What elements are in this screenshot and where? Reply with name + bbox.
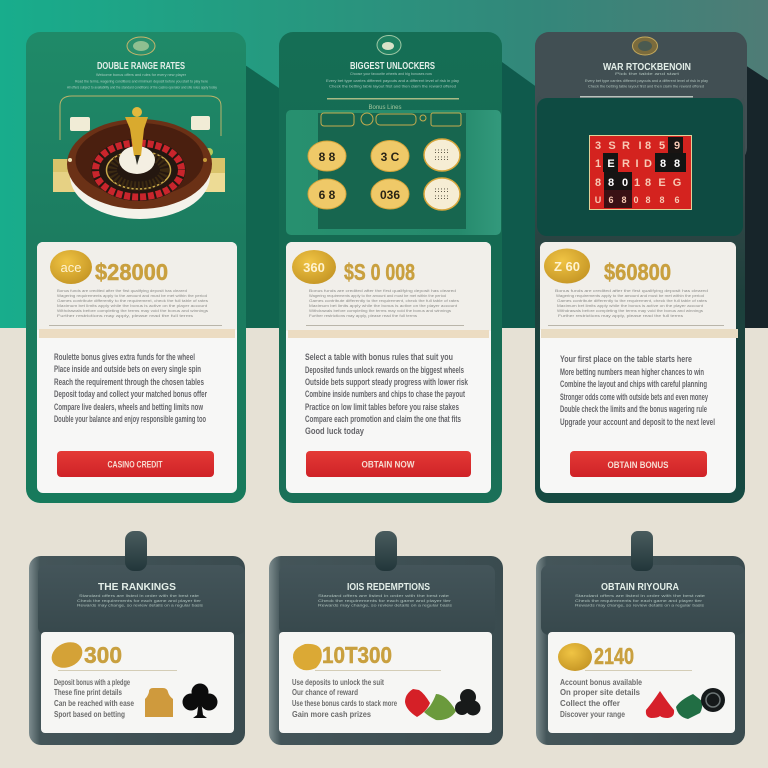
icon: gold crown turret	[125, 107, 148, 165]
text block: fine print: Withdrawals before completing the terms may void the bonus and winnings	[557, 308, 703, 313]
chart: red number grid: 8	[645, 177, 651, 189]
panel: dark green table	[537, 98, 743, 236]
text block: fine print: Wagering requirements apply to the amount and must be met within the period	[556, 293, 704, 298]
text block: description: Your first place on the table starts here	[560, 354, 692, 364]
icon: right bill	[191, 116, 210, 130]
betting controls	[321, 113, 461, 126]
background: lower beige band	[0, 328, 768, 768]
text block: intro: Rewards may change, so review details on a regular basis	[77, 604, 203, 608]
text block: Use deposits to unlock the suit	[292, 678, 384, 687]
panel: white offer	[41, 632, 234, 733]
text block: description	[560, 354, 715, 427]
text block: description: Reach the requirement through the chosen tables	[54, 377, 204, 387]
coin grid: 3 C	[381, 150, 400, 164]
button: OBTAIN BONUS	[608, 460, 668, 471]
chart: red number grid: 8	[645, 195, 651, 205]
chart: red number grid: 1	[634, 177, 640, 189]
text block: Account bonus available	[560, 678, 642, 687]
background: dark side shadows	[245, 62, 768, 328]
text block: description: Compare each promotion and claim the one that fits	[305, 414, 461, 424]
icon: card 1 emblem	[127, 37, 155, 55]
button: CASINO CREDIT	[108, 460, 163, 470]
coin grid: :::::	[434, 149, 450, 155]
text block: description	[54, 352, 207, 424]
text block: description: Select a table with bonus rules that suit you	[305, 352, 453, 362]
text block: fine print: Games contribute differently to the requirement, check the full table of rates	[57, 298, 208, 303]
chart: red number grid: G	[673, 177, 681, 189]
text block	[292, 678, 397, 719]
panel: white offer	[548, 632, 735, 733]
heading: card 1: DOUBLE RANGE RATES	[97, 61, 185, 72]
icon: clip	[125, 531, 147, 571]
text block: Discover your range	[560, 710, 625, 719]
chart: red number grid: 3	[595, 140, 601, 152]
chart: red number grid: R	[622, 158, 630, 170]
icon: red spade	[646, 691, 674, 718]
text block: fine print: Games contribute differently to the requirement, check the full table of rates	[557, 298, 707, 303]
text block	[54, 678, 134, 719]
chart: red number grid: U	[595, 195, 601, 205]
text block: intro: Standard offers are listed in order with the best rate	[575, 594, 705, 598]
text block: fine print	[309, 288, 459, 318]
coin grid: 8 8	[319, 150, 336, 164]
icon: clip	[631, 531, 653, 571]
text block: description: Compare live dealers, wheels and betting limits now	[54, 402, 204, 412]
icon: gold coin	[292, 250, 336, 284]
text block: card 2 intro: Choose your favourite wheels and big bonuses now	[350, 72, 432, 76]
heading: OBTAIN RIYOURA	[601, 582, 679, 593]
icon: green chip	[424, 694, 456, 720]
text block: intro: Check the requirements for each game and player tier	[575, 599, 703, 603]
chart: red number grid: 0	[622, 177, 628, 189]
amount: 10T300	[322, 642, 392, 668]
icon: card 2 emblem	[377, 36, 401, 54]
text block: Use these bonus cards to stack more	[292, 699, 397, 708]
coin grid: :::::	[434, 156, 450, 162]
chart: red number grid: D	[644, 158, 652, 170]
panel: card 1	[26, 32, 246, 503]
text block: card 2 intro: Every bet type carries different payouts and a different level of risk in play	[326, 79, 459, 83]
panel: card 1 offer	[37, 242, 237, 493]
icon: black chip	[701, 688, 725, 712]
text block: card 2 intro: Check the betting table layout first and then claim the reward offered	[329, 84, 456, 88]
chart: red number grid: I	[638, 140, 642, 152]
chart: red number grid: 8	[660, 158, 666, 170]
chart: red number grid: R	[622, 140, 630, 152]
amount: 2140	[594, 643, 634, 669]
text block: intro	[575, 594, 705, 608]
text block: description: Place inside and outside bets on every single spin	[54, 364, 201, 374]
button	[57, 451, 214, 477]
chart: red number grid: 8	[621, 195, 627, 205]
text block: These fine print details	[54, 688, 122, 697]
amount: $S 0 008	[344, 259, 415, 285]
amount: 300	[84, 642, 122, 668]
text block: intro: Check the requirements for each game and player tier	[318, 599, 452, 603]
text block: Collect the offer	[560, 699, 620, 708]
icon: gold box	[145, 688, 173, 717]
text block	[560, 678, 642, 719]
text block: fine print: Bonus funds are credited after the first qualifying deposit has cleared	[309, 288, 456, 293]
text block: description: Roulette bonus gives extra funds for the wheel	[54, 352, 195, 362]
text block: card 3 intro: Pick the table and start	[615, 72, 679, 76]
text block: intro: Check the requirements for each game and player tier	[77, 599, 202, 603]
icon: black spade	[455, 689, 480, 716]
chart: red number grid: 8	[608, 177, 614, 189]
chart: red number grid: 8	[595, 177, 601, 189]
text block: fine print: Further restrictions may apply, please read the full terms	[309, 313, 417, 318]
button	[570, 451, 707, 477]
text block: fine print	[57, 288, 208, 318]
heading: IOIS REDEMPTIONS	[347, 582, 430, 593]
text block: card 3 intro	[585, 72, 708, 88]
text block: On proper site details	[560, 688, 641, 697]
chart: red number grid: 5	[659, 140, 665, 152]
text block: description: Good luck today	[305, 426, 364, 436]
coin grid: :::::	[434, 188, 450, 194]
text block: description	[305, 352, 469, 436]
text block: intro: Rewards may change, so review details on a regular basis	[575, 604, 704, 608]
text block: description: Combine inside numbers and chips to chase the payout	[305, 389, 465, 399]
text block: card 3 intro: Check the betting table layout first and then claim the reward offered	[588, 84, 704, 88]
text block: card 1 intro	[67, 73, 217, 90]
panel: white offer	[279, 632, 492, 733]
text block: Sport based on betting	[54, 710, 125, 719]
button	[306, 451, 471, 477]
text block: intro: Standard offers are listed in order with the best rate	[79, 594, 199, 598]
icon: roulette wheel	[67, 107, 212, 219]
text block: description: Double your balance and enjoy responsible gaming too	[54, 414, 206, 424]
panel: card 3 offer	[540, 242, 738, 493]
icon: clip	[375, 531, 397, 571]
text block: card 1 intro: All offers subject to availability and the standard conditions of the casino operator and site rules apply today	[67, 86, 217, 90]
text block: intro	[77, 594, 203, 608]
decorative frame around wheel	[60, 96, 221, 140]
icon: right chips	[204, 148, 225, 192]
coin grid: 036	[380, 188, 400, 202]
chart: red number grid: I	[635, 158, 639, 170]
background: upper gradient band	[0, 0, 768, 329]
text block: fine print: Bonus funds are credited after the first qualifying deposit has cleared	[555, 288, 708, 293]
chart: red number grid	[589, 135, 692, 210]
text block: card 1 intro: Welcome bonus offers and rules for every new player	[96, 73, 187, 77]
text block: fine print: Games contribute differently to the requirement, check the full table of rates	[309, 298, 459, 303]
chart: red number grid: E	[658, 177, 666, 189]
amount: $28000	[95, 259, 168, 285]
text block: description: Outside bets support steady progress with lower risk	[305, 377, 469, 387]
heading: THE RANKINGS	[98, 582, 176, 593]
icon: card 3 emblem	[632, 37, 658, 55]
text block: fine print: Withdrawals before completing the terms may void the bonus and winnings	[57, 308, 208, 313]
chart: red number grid: 1	[595, 158, 601, 170]
text block: Our chance of reward	[292, 688, 358, 697]
text block: intro: Rewards may change, so review details on a regular basis	[318, 604, 452, 608]
panel: lower card 1	[29, 531, 245, 745]
text block: fine print: Wagering requirements apply to the amount and must be met within the period	[309, 293, 446, 298]
icon: gold coin	[293, 644, 322, 670]
chart: red number grid: 8	[659, 195, 665, 205]
text block: fine print: Withdrawals before completing the terms may void the bonus and winnings	[309, 308, 451, 313]
text block: fine print: Bonus funds are credited after the first qualifying deposit has cleared	[57, 288, 187, 293]
icon: left chips	[53, 159, 79, 192]
text block: Can be reached with ease	[54, 699, 134, 708]
chart: red number grid: S	[608, 140, 616, 152]
chart: red number grid: 6	[608, 195, 614, 205]
icon: gold coin	[50, 250, 92, 284]
text block: Deposit bonus with a pledge	[54, 678, 130, 687]
chart: red number grid: 0	[633, 195, 639, 205]
text block: fine print	[555, 288, 708, 318]
icon: green gem	[676, 694, 702, 719]
heading: card 2: BIGGEST UNLOCKERS	[350, 61, 435, 72]
label: card 2 table: Bonus Lines	[368, 105, 402, 111]
icon: gold coin	[47, 637, 87, 673]
icon: gold coin: Z 60	[554, 259, 580, 274]
text block: description: Deposited funds unlock rewards on the biggest wheels	[305, 365, 464, 375]
text block: description: Deposit today and collect your matched bonus offer	[54, 389, 207, 399]
chart: red number grid: E	[607, 158, 615, 170]
panel: card 3	[535, 32, 747, 503]
icon: gold coin: ace	[61, 260, 81, 275]
text block: fine print: Further restrictions may apply, please read the full terms	[57, 313, 193, 318]
panel: lower card 3	[536, 531, 745, 745]
text block: fine print: Maximum bet limits apply while the bonus is active on the player account	[57, 303, 208, 308]
chart: red number grid: 8	[674, 158, 680, 170]
amount: $60800	[604, 259, 671, 285]
text block: card 3 intro: Every bet type carries different payouts and a different level of risk in play	[585, 79, 708, 83]
text block: fine print: Wagering requirements apply to the amount and must be met within the period	[57, 293, 207, 298]
icon: gold coin: 360	[303, 260, 325, 275]
text block: fine print: Maximum bet limits apply while the bonus is active on the player account	[557, 303, 704, 308]
panel: card 2	[279, 32, 502, 503]
panel: card 2 offer	[286, 242, 491, 493]
panel: betting table screen	[286, 110, 501, 235]
coin grid	[308, 139, 460, 210]
text block: intro	[318, 594, 452, 608]
coin grid: 6 8	[319, 188, 336, 202]
heading: card 3: WAR RTOCKBENOIN	[603, 62, 691, 73]
icon: gold coin	[558, 643, 592, 671]
icon: club	[182, 684, 218, 718]
text block: card 2 intro	[326, 72, 459, 88]
coin grid: :::::	[434, 195, 450, 201]
text block: intro: Standard offers are listed in order with the best rate	[318, 594, 449, 598]
icon: gold coin	[544, 248, 590, 284]
icon: left bill	[70, 117, 90, 131]
text block: fine print: Maximum bet limits apply while the bonus is active on the player account	[309, 303, 458, 308]
text block: Gain more cash prizes	[292, 710, 372, 719]
text block: fine print: Further restrictions may apply, please read the full terms	[558, 313, 683, 318]
button: OBTAIN NOW	[362, 460, 415, 470]
text block: description: Practice on low limit tables before you raise stakes	[305, 402, 459, 412]
text block: card 1 intro: Read the terms, wagering conditions and minimum deposit before you start to play here	[75, 80, 208, 84]
panel: lower card 2	[269, 531, 503, 745]
chart: red number grid: 9	[674, 140, 680, 152]
chart: red number grid: 6	[674, 195, 680, 205]
chart: red number grid: 8	[645, 140, 651, 152]
icon: red heart	[405, 689, 430, 717]
